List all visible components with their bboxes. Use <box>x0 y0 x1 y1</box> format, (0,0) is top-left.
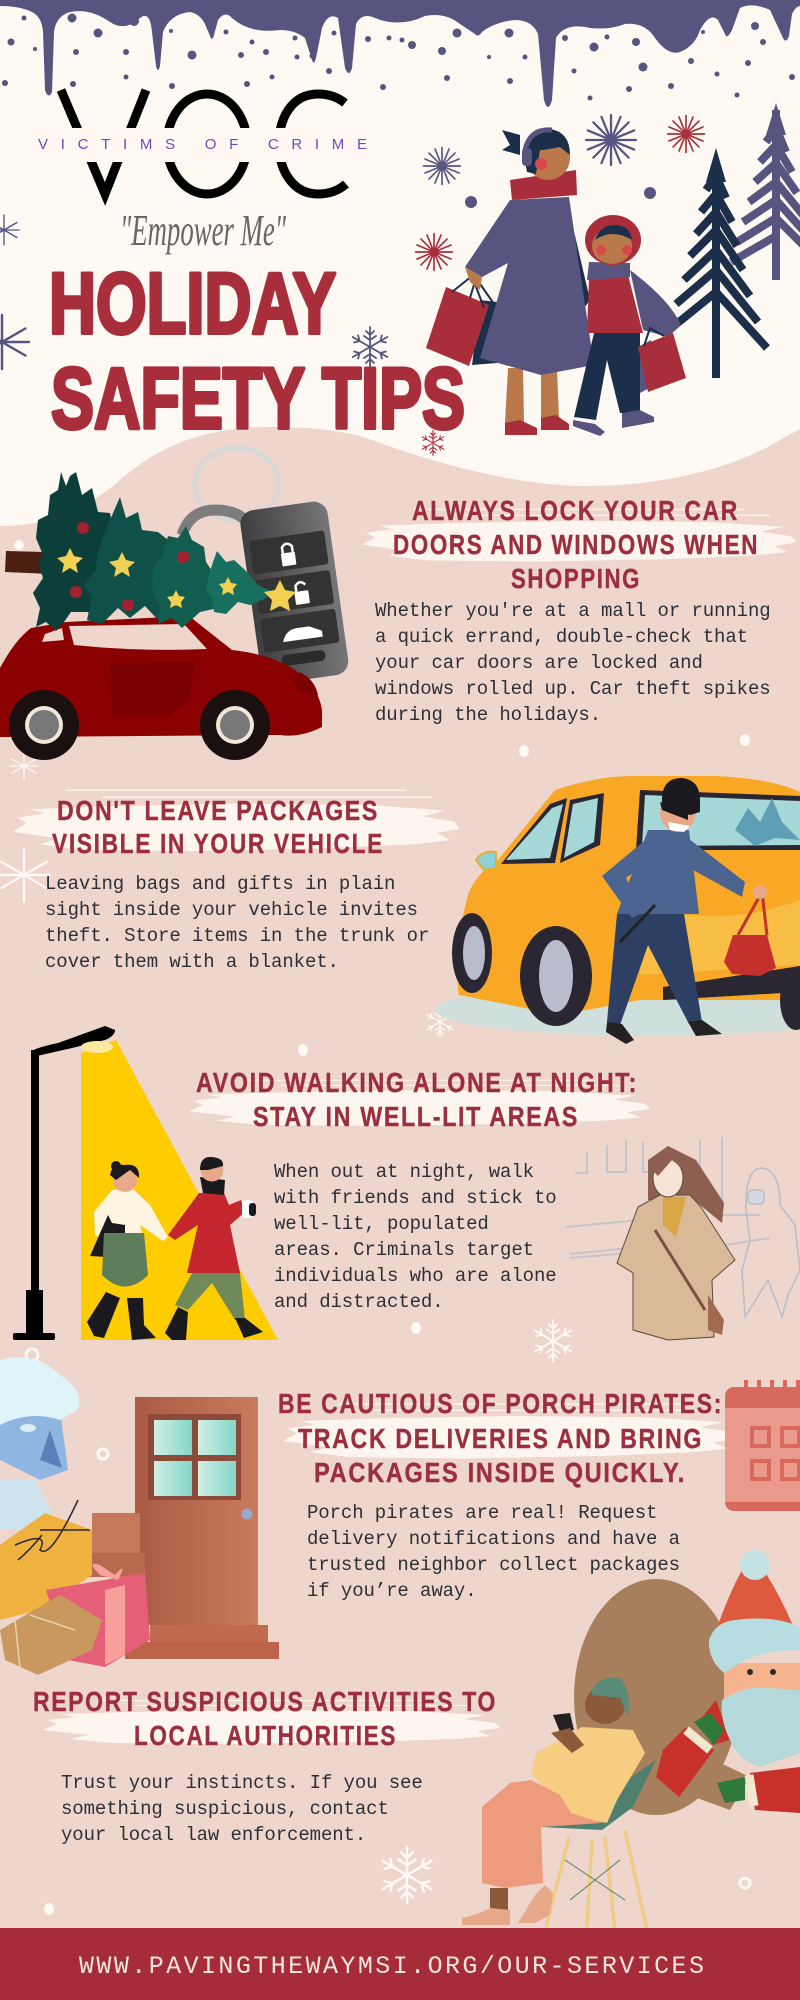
heading <box>278 1388 723 1488</box>
body text: and distracted. <box>274 1291 444 1313</box>
heading highlight <box>362 509 796 562</box>
body text <box>45 873 429 973</box>
woman walking <box>87 1161 168 1340</box>
body text: well-lit, populated <box>274 1213 489 1235</box>
illustration: woman followed at night <box>566 1137 800 1340</box>
chair <box>541 1760 656 1930</box>
pink wave background <box>0 427 800 2000</box>
body text: Whether you're at a mall or running <box>375 600 771 622</box>
steps <box>125 1625 279 1659</box>
key ring <box>182 448 279 535</box>
section 4: porch pirates <box>278 1388 737 1602</box>
heading <box>52 795 384 859</box>
title: HOLIDAY <box>49 256 336 352</box>
body text: Porch pirates are real! Request <box>307 1502 657 1524</box>
section 3: walking at night <box>189 1067 650 1313</box>
heading <box>196 1067 638 1132</box>
grumpy blue man <box>0 1357 80 1530</box>
heading highlight <box>189 1080 650 1126</box>
woman in coat <box>617 1146 735 1340</box>
logo: VOC <box>30 90 380 194</box>
hooded figure <box>742 1168 800 1317</box>
heading: STAY IN WELL-LIT AREAS <box>253 1101 579 1132</box>
decorative snowflakes and bursts <box>0 115 704 1903</box>
child <box>573 215 686 436</box>
gift ribbon <box>15 1500 90 1560</box>
heading: ALWAYS LOCK YOUR CAR <box>412 495 739 526</box>
lamp post <box>13 1026 115 1340</box>
body text: trusted neighbor collect packages <box>307 1554 680 1576</box>
white dots <box>14 540 750 1915</box>
footer: WWW.PAVINGTHEWAYMSI.ORG/OUR-SERVICES <box>79 1952 704 1981</box>
yellow gift <box>0 1513 92 1620</box>
body text: Trust your instincts. If you see <box>61 1772 423 1794</box>
illustration: porch with packages <box>0 1357 279 1675</box>
heading: SHOPPING <box>511 563 641 594</box>
mother <box>465 129 594 435</box>
title: SAFETY TIPS <box>51 351 465 447</box>
pink gift <box>46 1564 150 1667</box>
falling snow dots <box>2 14 795 208</box>
orange car <box>452 776 800 1030</box>
body text: When out at night, walk <box>274 1161 534 1183</box>
thief <box>602 778 776 1044</box>
heading: VISIBLE IN YOUR VEHICLE <box>52 828 384 859</box>
body text: Leaving bags and gifts in plain <box>45 873 395 895</box>
stolen red bag <box>724 885 776 976</box>
heading: AVOID WALKING ALONE AT NIGHT: <box>196 1067 638 1098</box>
heading highlight <box>283 1404 737 1458</box>
illustration: trees <box>669 103 800 378</box>
heading: TRACK DELIVERIES AND BRING <box>298 1423 703 1454</box>
man walking <box>165 1157 263 1340</box>
sack <box>574 1579 750 1815</box>
heading highlight <box>43 1700 500 1744</box>
christmas tree on roof <box>5 472 296 631</box>
body text: cover them with a blanket. <box>45 951 339 973</box>
illustration: thief and orange car <box>435 776 800 1044</box>
door <box>135 1397 258 1625</box>
illustration: mother and child shopping <box>426 129 686 436</box>
illustration: person on phone in chair <box>462 1678 656 1930</box>
santa <box>656 1550 800 1813</box>
light cone <box>81 1040 278 1340</box>
body text: with friends and stick to <box>274 1187 557 1209</box>
stars and baubles <box>57 548 296 611</box>
brown gift <box>0 1595 102 1675</box>
person <box>462 1678 645 1925</box>
key fob <box>239 500 350 685</box>
body text: during the holidays. <box>375 704 601 726</box>
body text: your car doors are locked and <box>375 652 703 674</box>
body text: your local law enforcement. <box>61 1824 366 1846</box>
heading: PACKAGES INSIDE QUICKLY. <box>314 1457 686 1488</box>
heading <box>33 1686 497 1751</box>
icicle border <box>0 0 800 107</box>
illustration: key fob, car and tree <box>0 448 350 760</box>
body text <box>307 1502 680 1602</box>
heading highlight <box>13 790 459 851</box>
title <box>49 256 465 447</box>
illustration: street lamp and walking couple <box>13 1026 278 1340</box>
section 5: report suspicious activity <box>33 1686 500 1846</box>
body text: sight inside your vehicle invites <box>45 899 418 921</box>
building outlines <box>566 1137 770 1258</box>
body text: if you’re away. <box>307 1580 477 1602</box>
heading <box>393 495 759 594</box>
heading: DON'T LEAVE PACKAGES <box>57 795 379 826</box>
body text: areas. Criminals target <box>274 1239 534 1261</box>
body text: a quick errand, double-check that <box>375 626 748 648</box>
body text <box>61 1772 423 1846</box>
cardboard boxes <box>87 1513 145 1577</box>
body text <box>274 1161 557 1313</box>
body text: something suspicious, contact <box>61 1798 389 1820</box>
section 1: lock car doors <box>362 495 796 726</box>
red car <box>0 616 322 760</box>
footer <box>0 1928 800 2000</box>
tagline: Empower Me: "Empower Me" <box>120 206 286 255</box>
body text <box>375 600 771 726</box>
section 2: packages <box>13 790 459 973</box>
body text: windows rolled up. Car theft spikes <box>375 678 771 700</box>
heading: REPORT SUSPICIOUS ACTIVITIES TO <box>33 1686 497 1717</box>
body text: theft. Store items in the trunk or <box>45 925 429 947</box>
logo: VOC: VICTIMS OF CRIME <box>38 136 367 153</box>
body text: delivery notifications and have a <box>307 1528 680 1550</box>
body text: individuals who are alone <box>274 1265 557 1287</box>
icon: calendar <box>725 1380 800 1511</box>
mother's shopping bags <box>426 276 497 366</box>
illustration: santa and sack <box>574 1550 800 1815</box>
heading: LOCAL AUTHORITIES <box>134 1720 397 1751</box>
